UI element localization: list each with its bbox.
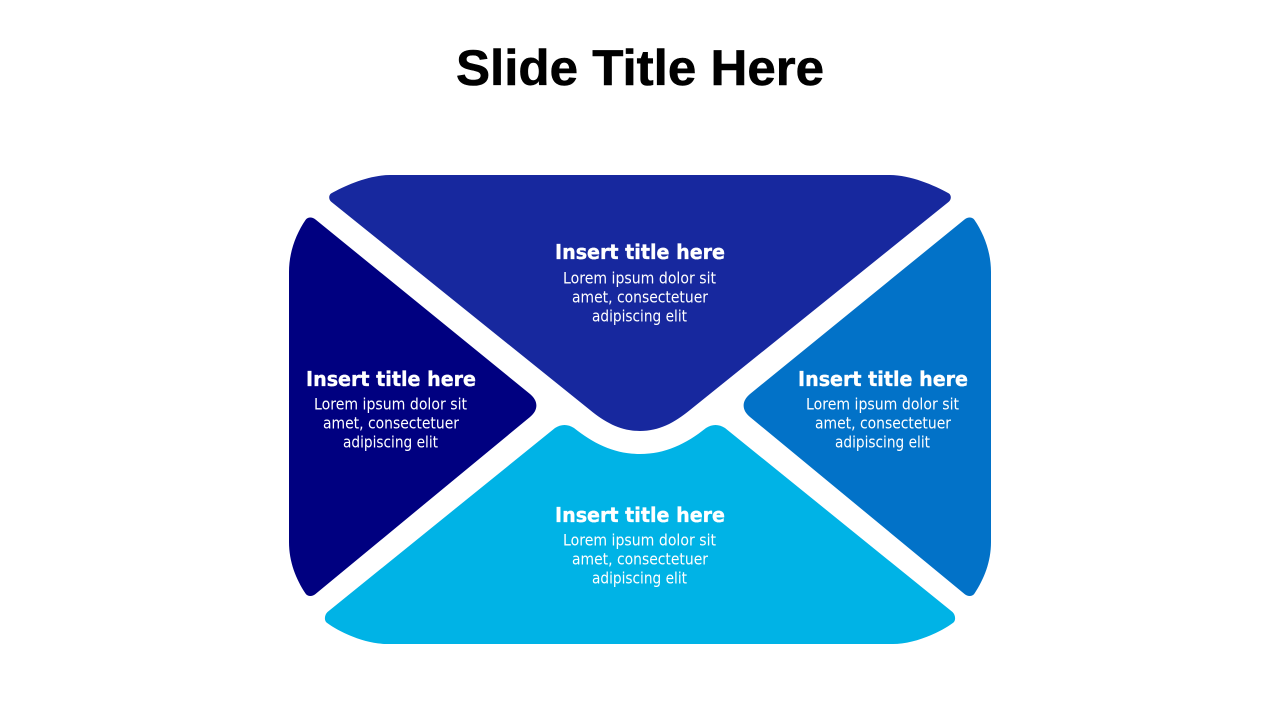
heading: bottom panel: Insert title here — [555, 503, 725, 527]
body: top panel — [563, 268, 716, 326]
shape: right panel — [744, 217, 991, 596]
shape: left panel — [289, 217, 536, 596]
panel: bottom — [325, 425, 955, 644]
text: right panel — [798, 367, 968, 452]
shape: bottom panel — [325, 425, 955, 644]
body: right panel: amet, consectetuer — [815, 414, 951, 432]
body: bottom panel — [563, 530, 716, 588]
title: Slide Title Here — [456, 40, 824, 96]
body: right panel — [806, 394, 959, 452]
body: right panel: Lorem ipsum dolor sit — [806, 394, 959, 414]
body: left panel: adipiscing elit — [343, 432, 438, 452]
panel: top — [329, 175, 951, 431]
body: top panel: adipiscing elit — [592, 306, 687, 326]
heading: right panel: Insert title here — [798, 367, 968, 391]
body: right panel: adipiscing elit — [835, 432, 930, 452]
text: top panel — [555, 240, 725, 326]
body: bottom panel: adipiscing elit — [592, 568, 687, 588]
body: top panel: amet, consectetuer — [572, 288, 708, 306]
panel: right — [744, 217, 991, 596]
body: left panel: Lorem ipsum dolor sit — [314, 394, 467, 414]
shape: top panel — [329, 175, 951, 431]
heading: left panel: Insert title here — [306, 367, 476, 391]
panel: left — [289, 217, 536, 596]
body: left panel — [314, 394, 467, 452]
body: bottom panel: amet, consectetuer — [572, 550, 708, 568]
body: bottom panel: Lorem ipsum dolor sit — [563, 530, 716, 550]
body: top panel: Lorem ipsum dolor sit — [563, 268, 716, 288]
heading: top panel: Insert title here — [555, 240, 725, 264]
text: left panel — [306, 367, 476, 452]
body: left panel: amet, consectetuer — [323, 414, 459, 432]
text: bottom panel — [555, 503, 725, 588]
